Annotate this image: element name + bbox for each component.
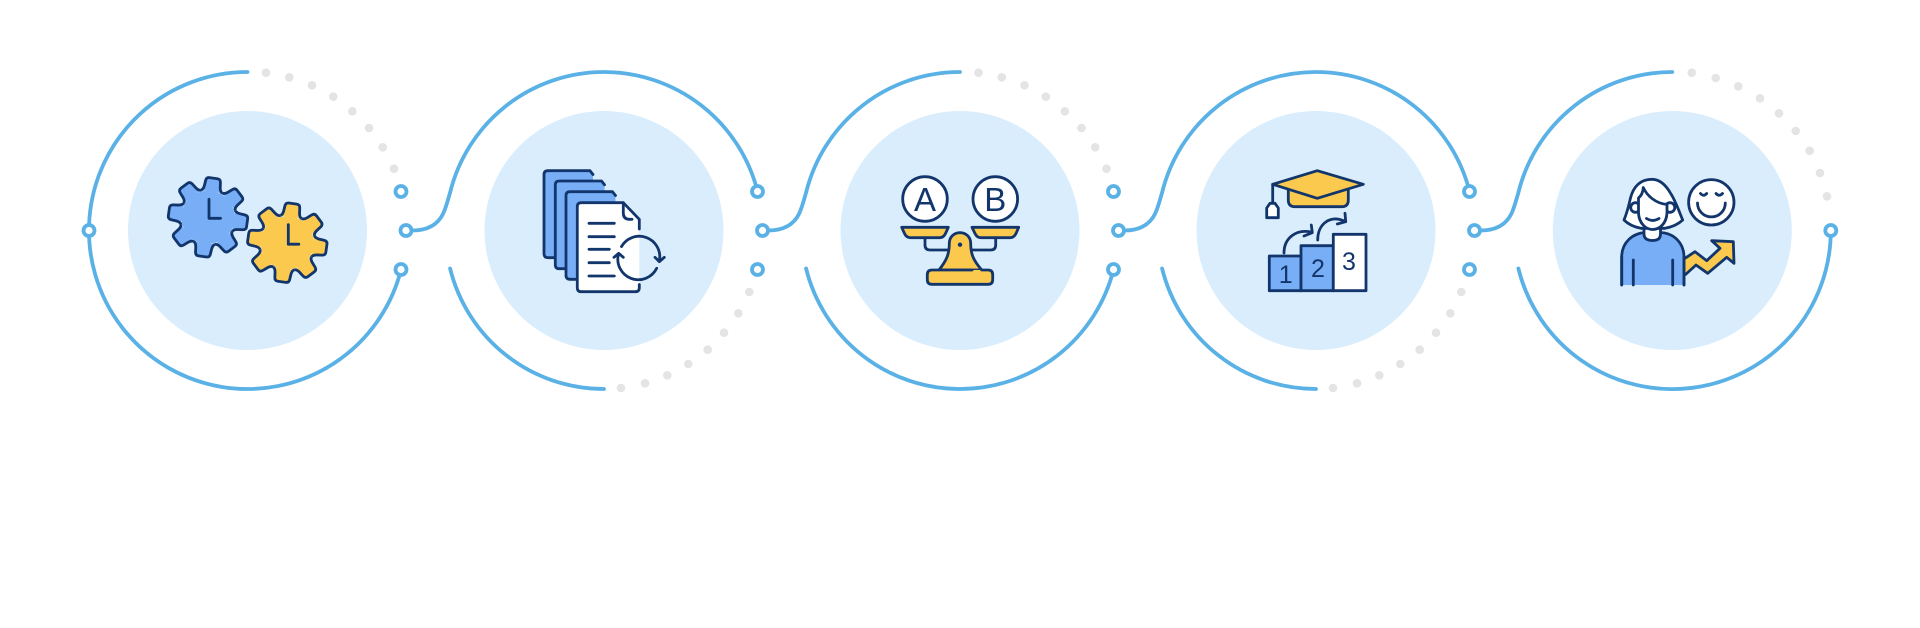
step 5 background disc — [1553, 111, 1792, 350]
icon: ranked podium with arrows: 2 — [1311, 255, 1325, 283]
icon: document stack with refresh arrows — [544, 171, 664, 292]
step 3 background disc — [840, 111, 1080, 350]
step 1 background disc — [128, 111, 367, 350]
step 4 ring and nodes — [1124, 72, 1480, 392]
step 4 background disc — [1196, 111, 1436, 350]
icon: yellow clock gear — [243, 198, 332, 287]
icon: smiley face — [1689, 180, 1734, 225]
step 1 ring and nodes — [84, 68, 412, 389]
panel: step 2 documents — [412, 72, 768, 392]
panel: step 3 A/B scale — [768, 68, 1124, 389]
icon: woman portrait — [1622, 179, 1684, 285]
icon: ranked podium with arrows: 1 — [1279, 261, 1293, 289]
step 5 ring and nodes — [1480, 68, 1836, 389]
icon: balance scale comparing A and B: B — [984, 181, 1006, 218]
panel: step 5 satisfied woman — [1480, 68, 1836, 389]
step 2 ring and nodes — [412, 72, 768, 392]
icon: graduation cap — [1267, 171, 1363, 218]
icon: ranked podium with arrows: 3 — [1342, 248, 1356, 276]
panel: step 4 graduation ranking — [1124, 72, 1480, 392]
icon: ranked podium with arrows — [1269, 213, 1366, 291]
step 3 ring and nodes — [768, 68, 1124, 389]
icon: blue clock gear — [163, 173, 253, 262]
step 2 background disc — [484, 111, 724, 350]
icon: balance scale comparing A and B: A — [914, 181, 936, 218]
icon: rising yellow arrow — [1685, 241, 1734, 275]
icon: balance scale comparing A and B — [902, 177, 1019, 284]
panel: step 1 gears — [84, 68, 412, 389]
